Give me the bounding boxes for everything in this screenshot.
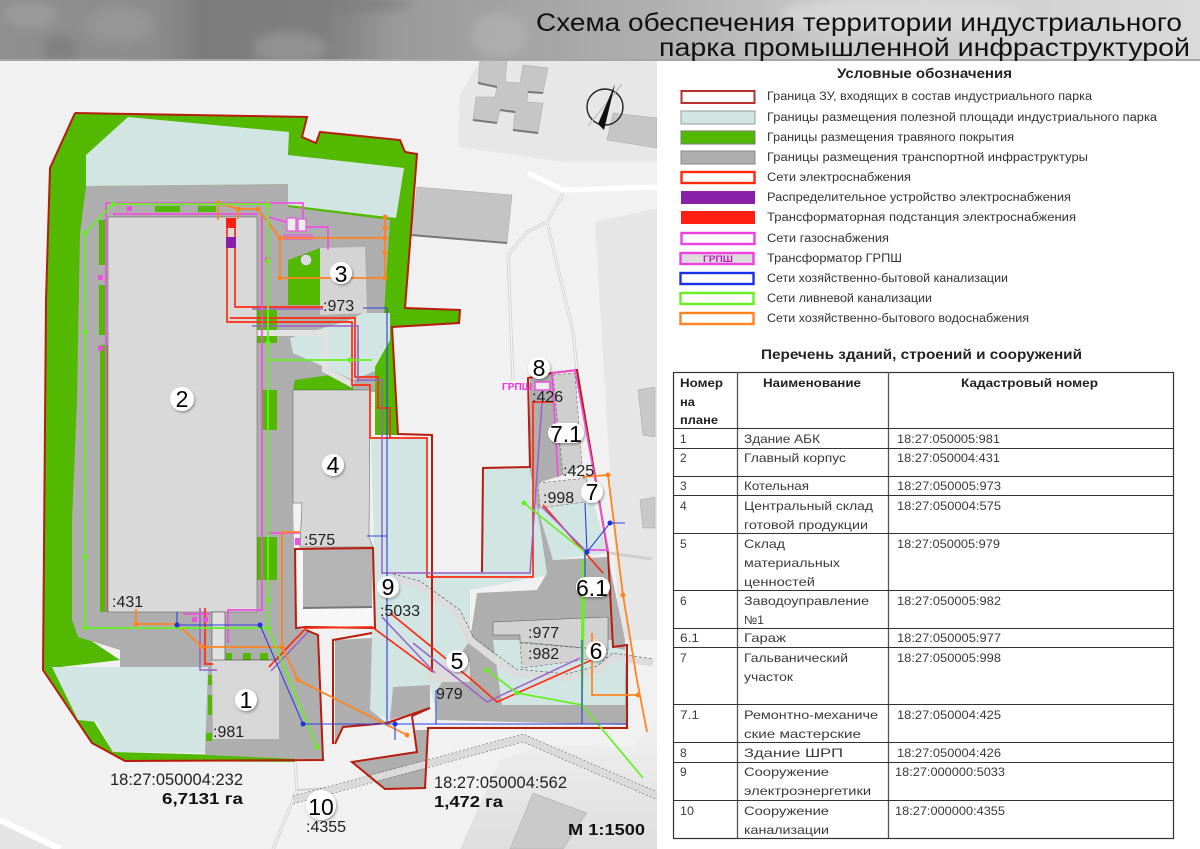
label: ГРПШ: ГРПШ [502,382,532,393]
legend swatches [680,91,755,324]
table rows: готовой продукции [744,518,868,532]
transport infrastructure gray [72,184,390,760]
gas networks [98,203,608,643]
water supply networks [136,203,647,735]
table rows: 18:27:050004:431 [897,451,1000,465]
plan number labels: 6.1 [576,575,608,601]
legend entries: Сети газоснабжения [767,233,889,245]
site boundaries [43,113,627,789]
legend heading: Условные обозначения [837,66,1012,81]
building 7 [538,478,587,508]
table rows: участок [744,670,794,684]
table rows: Склад [744,537,785,551]
plan number markers [170,262,610,820]
table rows: 10 [680,804,694,818]
legend entries: Сети ливневой канализации [767,293,932,305]
legend entries [767,91,1158,325]
plan number labels: 10 [308,794,334,820]
green cover zone [43,113,460,762]
table rows: Главный корпус [744,451,846,465]
table rows: 5 [680,537,687,551]
plot labels and scale [110,770,645,839]
teal east [538,480,608,560]
cadastral labels on plan: :973 [323,298,354,315]
table header [680,376,1098,427]
plan number labels: 7.1 [550,421,582,447]
table heading: Перечень зданий, строений и сооружений [761,347,1082,362]
table header: Номер [680,376,723,390]
table rows: 18:27:050005:979 [897,537,1000,551]
cadastral labels on plan: :977 [528,625,559,642]
table rows: Заводоуправление [744,594,869,608]
buildings on site [108,217,608,739]
title: Схема обеспечения территории индустриального [536,9,1182,37]
table rows: Котельная [744,479,809,493]
table rows: Гараж [744,631,786,645]
table rows: материальных [744,556,840,570]
plan number labels: 7 [586,479,598,505]
sewer networks [177,308,627,740]
table rows: 6 [680,594,687,608]
legend entries: Границы размещения полезной площади индустриального парка [767,112,1158,124]
storm drain networks [85,204,643,778]
surrounding roads [0,173,657,849]
plan number labels: 6 [590,638,602,664]
legend entries: Границы размещения травяного покрытия [767,132,1014,144]
building 4 [293,390,373,547]
legend entries: Границы размещения транспортной инфраструктуры [767,152,1088,164]
legend entries: Сети хозяйственно-бытовой канализации [767,273,1008,285]
inner road [257,333,353,385]
plan number labels: 3 [335,261,347,287]
table rows: ские мастерские [744,727,861,741]
table rows: 18:27:050005:982 [897,594,1001,608]
table rows: 2 [680,451,687,465]
table rows: электроэнергетики [744,784,871,798]
legend swatches: ГРПШ [703,254,733,264]
plan number labels [176,261,608,820]
legend entries: Сети хозяйственно-бытового водоснабжения [767,313,1029,325]
legend entries: Распределительное устройство электроснабжения [767,192,1071,204]
table rows: 7 [680,651,687,665]
table rows: Здание АБК [744,432,820,446]
cadastral labels on plan: :575 [304,532,335,549]
table rows: 18:27:050004:425 [897,708,1001,722]
table rows: Сооружение [744,804,829,818]
cadastral labels on plan: 979 [436,686,463,703]
table of buildings [673,372,1174,838]
north arrow compass [587,84,623,130]
transport gray east and south [335,638,387,744]
electricity networks [200,218,603,702]
plot labels and scale: 18:27:050004:562 [434,773,567,792]
plot labels and scale: 18:27:050004:232 [110,770,243,789]
table rows: 3 [680,479,687,493]
table header: плане [680,413,718,427]
legend [680,66,1158,325]
building 7.1 [553,373,582,475]
useful area teal [86,117,404,218]
building 1 [212,660,279,739]
white yard around warehouse [295,548,375,628]
cadastral labels on plan: :998 [543,490,574,507]
table rows: 18:27:050005:973 [897,479,1001,493]
plan number labels: 9 [382,574,394,600]
legend entries: Сети электроснабжения [767,172,911,184]
cadastral labels on plan: :982 [528,646,559,663]
table rows: Здание ШРП [744,746,843,760]
table rows: 8 [680,746,687,760]
table rows: Сооружение [744,765,829,779]
table rows: Гальванический [744,651,848,665]
legend entries: Трансформаторная подстанция электроснабжения [767,212,1076,224]
map: site zones [43,113,660,804]
table rows: 4 [680,499,687,513]
title [536,9,1190,62]
electrical switchgear [226,218,236,228]
plot labels and scale: М 1:1500 [568,822,645,839]
table rows: 18:27:050004:575 [897,499,1001,513]
building 6 [520,643,608,668]
plan number labels: 1 [240,687,252,713]
table rows: 18:27:000000:5033 [895,765,1005,779]
cadastral labels on plan [112,298,594,836]
plot labels and scale: 6,7131 га [162,791,243,808]
surrounding buildings [411,60,657,849]
table rows: ценностей [744,575,815,589]
legend entries: Трансформатор ГРПШ [767,253,902,265]
table rows: 9 [680,765,687,779]
gas transformers [287,218,296,231]
table header: Кадастровый номер [961,376,1098,390]
cadastral labels on plan: :981 [213,724,244,741]
building 3 [320,247,367,315]
map base background [0,60,657,849]
plan number labels: 2 [176,386,188,412]
plan number labels: 8 [533,355,545,381]
legend entries: Граница ЗУ, входящих в состав индустриального парка [767,91,1093,103]
warehouse [303,548,373,608]
table rows: 18:27:050005:977 [897,631,1001,645]
plan number labels: 5 [451,648,463,674]
table rows: 18:27:050004:426 [897,746,1001,760]
table rows: Ремонтно-механиче [744,708,878,722]
cadastral labels on plan: :425 [563,463,594,480]
table rows: Центральный склад [744,499,873,513]
table rows [680,432,1005,837]
inner green patches [99,220,108,612]
plan number labels: 4 [327,452,340,478]
table header: на [680,395,695,409]
building 6.1 [493,617,608,650]
table header: Наименование [763,376,861,390]
right white panel [657,61,1200,849]
building 2 main block [108,217,257,612]
cadastral labels on plan: :431 [112,594,143,611]
table rows: 6.1 [680,631,699,645]
table grid [673,372,1174,838]
plot labels and scale: 1,472 га [434,794,503,811]
table rows: 7.1 [680,708,699,722]
title: парка промышленной инфраструктурой [659,34,1190,62]
building 5 [428,662,470,682]
header banner [0,0,1200,64]
table rows: 18:27:050005:998 [897,651,1001,665]
table rows: 1 [680,432,687,446]
cadastral labels on plan: :5033 [380,603,420,620]
table rows: канализации [744,823,829,837]
cadastral labels on plan: :4355 [306,819,346,836]
table rows: 18:27:050005:981 [897,432,1000,446]
table rows: 18:27:000000:4355 [895,804,1005,818]
table rows: №1 [744,613,764,627]
cadastral labels on plan: :426 [532,389,563,406]
